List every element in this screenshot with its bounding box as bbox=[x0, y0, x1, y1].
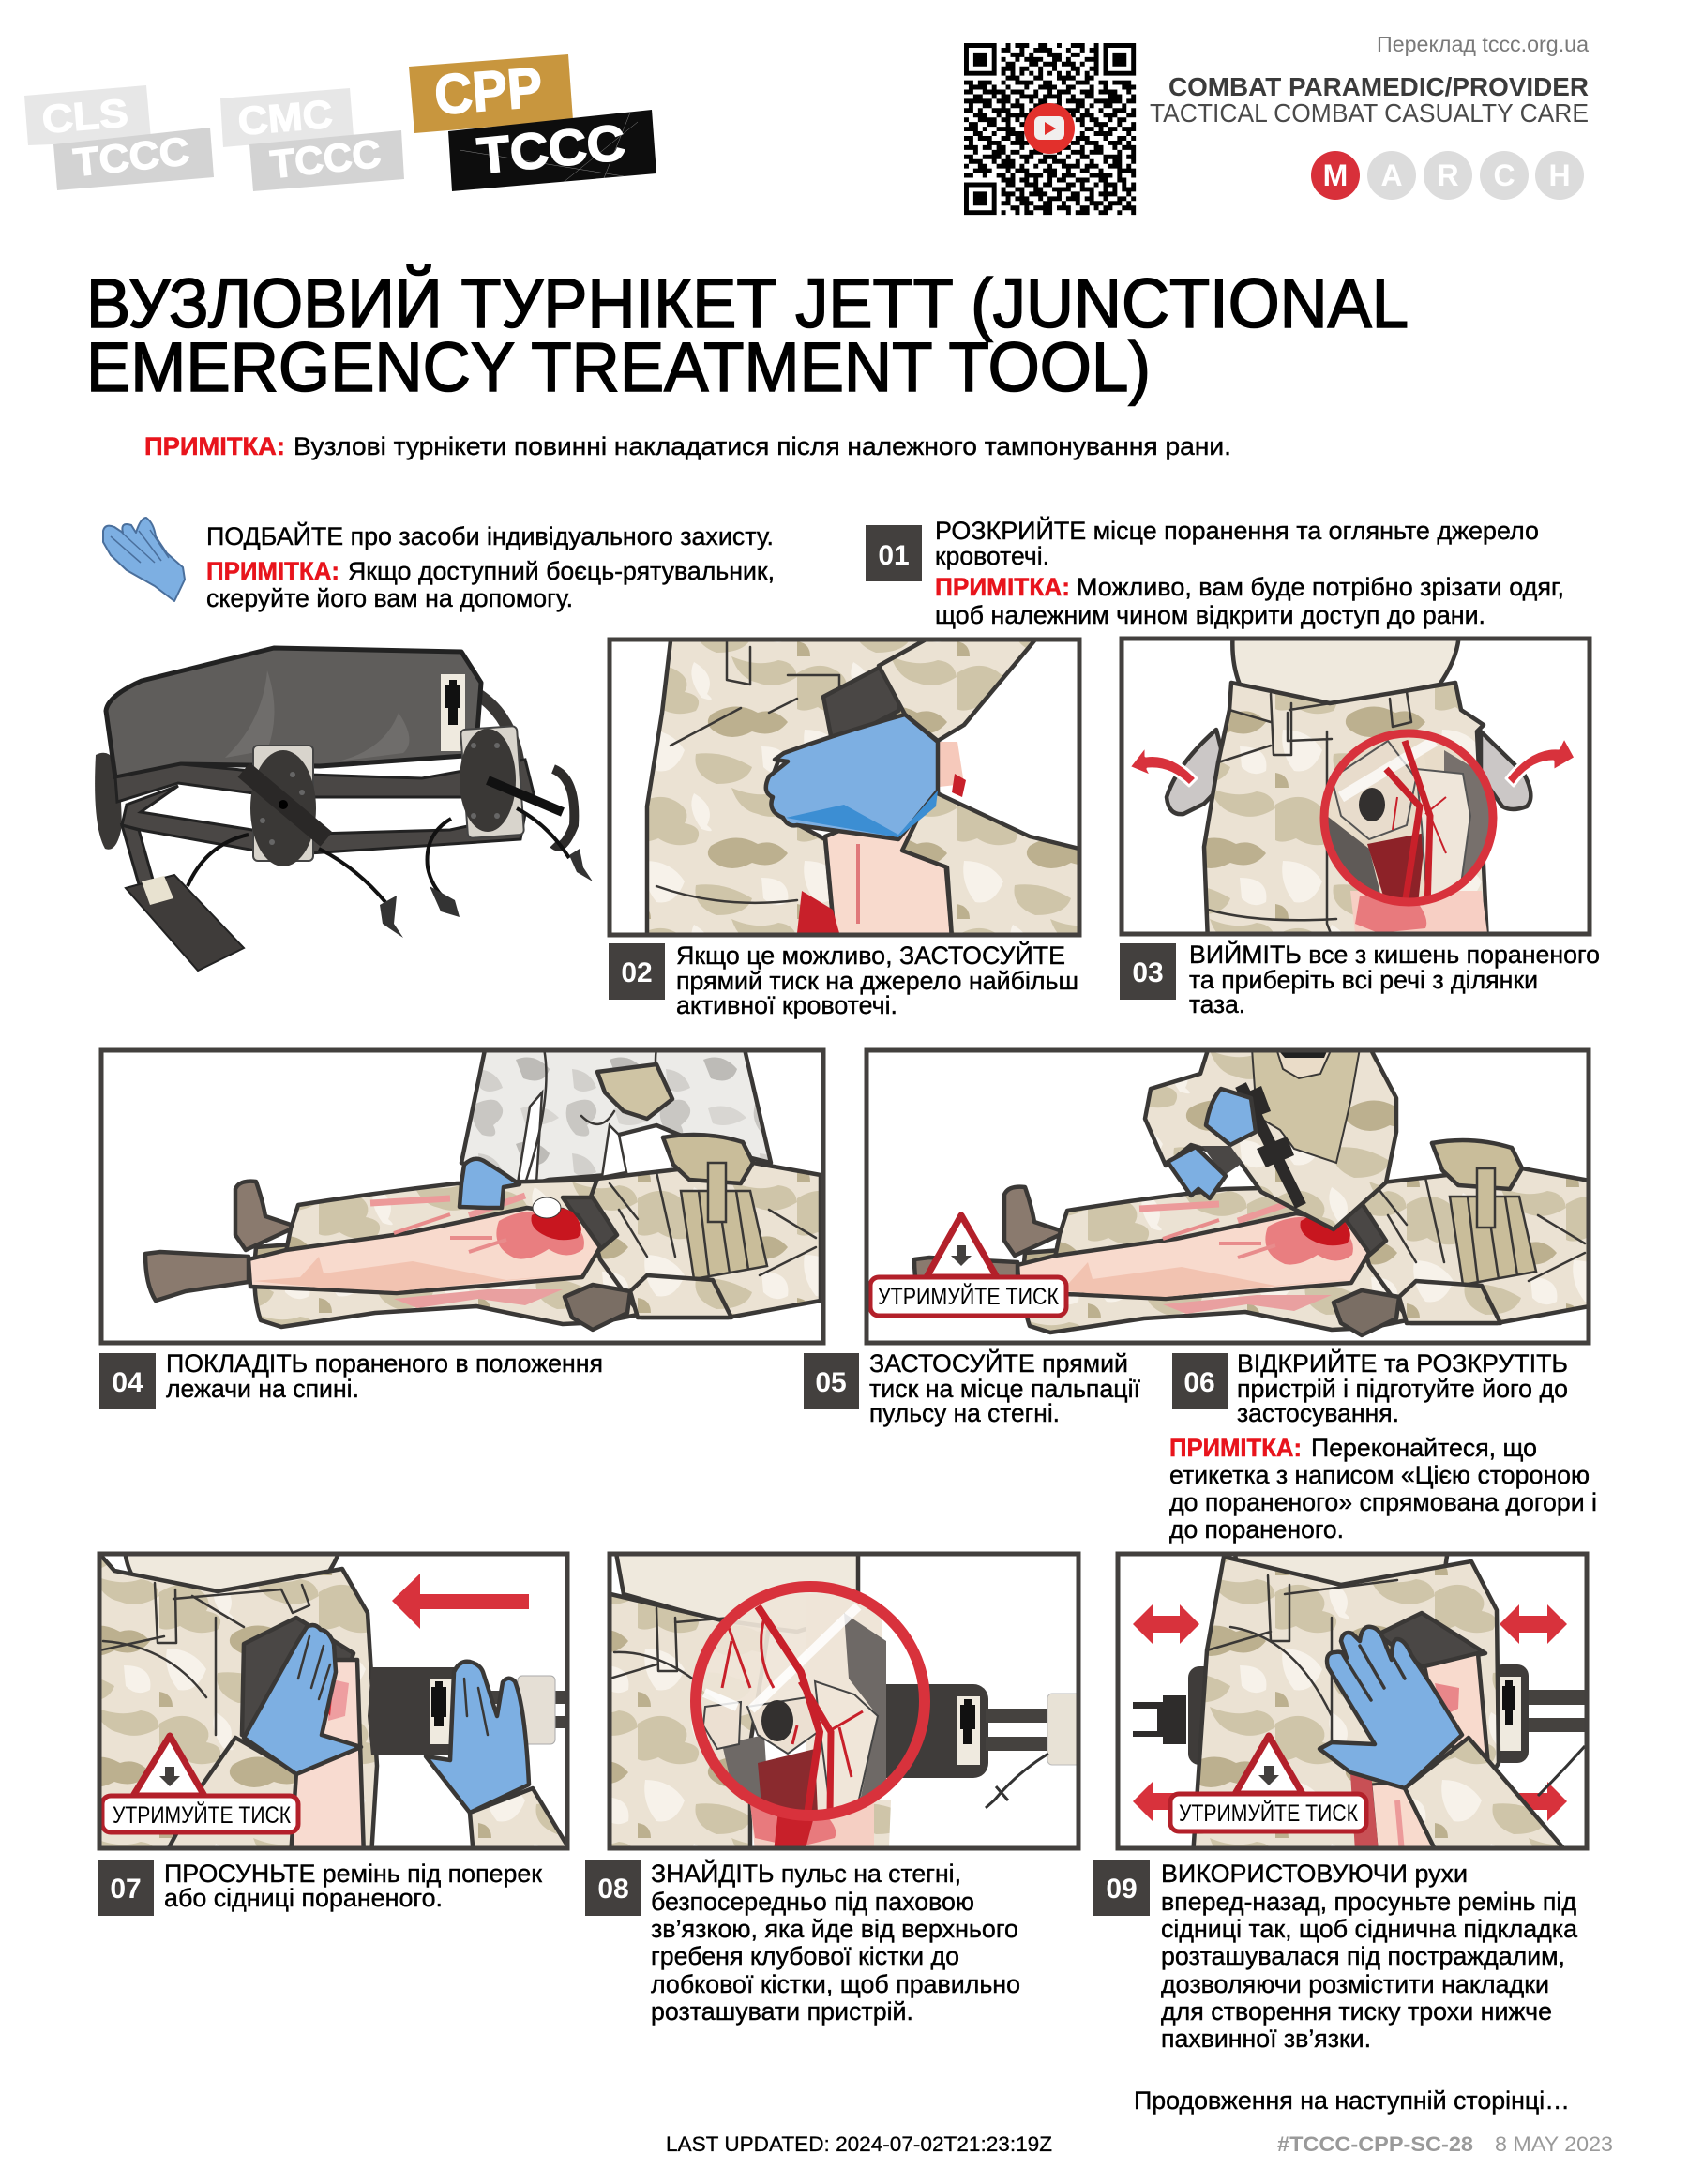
JETT label bbox=[957, 1696, 980, 1765]
torso bbox=[1230, 641, 1461, 701]
MARCH indicator: M bbox=[1323, 158, 1348, 192]
step 09 number: 09 bbox=[1106, 1874, 1138, 1905]
step 09 text: розташувалася під постраждалим, bbox=[1161, 1942, 1565, 1970]
step 06 number: 06 bbox=[1183, 1367, 1215, 1398]
step 08 text: розташувати пристрій. bbox=[651, 1997, 913, 2026]
MARCH indicator: R bbox=[1437, 158, 1459, 192]
JETT label bbox=[430, 1679, 454, 1744]
pressure pad bbox=[821, 666, 900, 735]
hold pressure label bbox=[1170, 1794, 1366, 1831]
step 04 text: ПОКЛАДІТЬ пораненого в положення bbox=[166, 1349, 603, 1378]
step 08 number bbox=[585, 1860, 641, 1916]
step 04 number bbox=[99, 1353, 156, 1409]
thigh with blood bbox=[1350, 891, 1487, 933]
right label bbox=[1500, 1677, 1521, 1751]
PPE text: ПРИМІТКА: bbox=[206, 557, 339, 585]
blue glove bbox=[766, 715, 938, 839]
step 08 text: зв’язкою, яка йде від верхнього bbox=[651, 1915, 1018, 1943]
step 07 text bbox=[164, 1860, 542, 1912]
step 02 text: активної кровотечі. bbox=[676, 991, 897, 1019]
badge: CPP TCCC active bbox=[409, 54, 656, 191]
step 07 number: 07 bbox=[110, 1874, 142, 1905]
step 05 text: пульсу на стегні. bbox=[869, 1399, 1060, 1427]
icon: video play bbox=[1024, 103, 1075, 154]
badge: CLS TCCC bbox=[24, 85, 214, 190]
arrow right bbox=[1506, 737, 1575, 786]
translation credit: Переклад tccc.org.ua bbox=[1377, 32, 1589, 56]
badge: CMC TCCC: CMC bbox=[236, 92, 334, 143]
badge: CPP TCCC active: TCCC bbox=[475, 114, 627, 185]
step 09 text: дозволяючи розмістити накладки bbox=[1161, 1970, 1549, 1998]
badge: CLS TCCC: CLS bbox=[40, 90, 129, 142]
device illustration: JETT tourniquet bbox=[95, 648, 593, 971]
dark pad bbox=[1378, 1613, 1485, 1666]
step 04 number: 04 bbox=[112, 1367, 143, 1398]
step 06 note: до пораненого. bbox=[1169, 1515, 1344, 1544]
step 02 number bbox=[609, 943, 665, 1000]
PPE text: скеруйте його вам на допомогу. bbox=[206, 584, 573, 612]
blue glove lower bbox=[1168, 1147, 1226, 1198]
dark pad bbox=[242, 1618, 354, 1747]
step 06 text bbox=[1237, 1349, 1568, 1427]
anatomy overlay bbox=[699, 1594, 886, 1819]
audience heading: COMBAT PARAMEDIC/PROVIDER bbox=[1168, 72, 1589, 101]
torso bbox=[614, 1543, 858, 1632]
step 01 text: щоб належним чином відкрити доступ до рани. bbox=[935, 601, 1485, 629]
step 04 text bbox=[166, 1349, 603, 1403]
medic pouch bbox=[597, 1064, 672, 1119]
torso bbox=[1233, 1543, 1449, 1587]
step 09 text bbox=[1161, 1860, 1577, 2053]
hold pressure label bbox=[102, 1796, 298, 1832]
panel: step 08 find pulse bbox=[605, 1543, 1085, 1857]
step 02 text bbox=[676, 941, 1078, 1019]
red circle bbox=[1324, 733, 1493, 902]
cord bbox=[1538, 1746, 1585, 1796]
step 09 text: для створення тиску трохи нижче bbox=[1161, 1997, 1552, 2026]
arrow left bbox=[1129, 746, 1197, 786]
step 07 number bbox=[98, 1860, 154, 1916]
step 02 number: 02 bbox=[621, 957, 653, 988]
badge: CLS TCCC: TCCC bbox=[71, 128, 191, 185]
QR code with video icon bbox=[964, 45, 1136, 213]
title bbox=[86, 264, 1409, 406]
sleeve upper arm bbox=[879, 633, 1041, 741]
top note: Вузлові турнікети повинні накладатися після належного тампонування рани. bbox=[294, 432, 1231, 460]
step 04 text: лежачи на спині. bbox=[166, 1375, 359, 1403]
right JETT end bbox=[1491, 1664, 1529, 1763]
right pad plate bbox=[460, 726, 563, 838]
trousers bbox=[1193, 1557, 1499, 1857]
step 05 text: тиск на місце пальпації bbox=[869, 1375, 1141, 1403]
title: ВУЗЛОВИЙ ТУРНІКЕТ JETT (JUNCTIONAL bbox=[86, 264, 1409, 342]
left pad plate bbox=[244, 746, 326, 866]
step 06 text: пристрій і підготуйте його до bbox=[1237, 1375, 1568, 1403]
panel: step 02 direct pressure bbox=[610, 633, 1083, 938]
icon: gloves bbox=[103, 518, 185, 601]
cord bbox=[986, 1754, 1048, 1808]
right pocket bbox=[1481, 731, 1530, 809]
step 08 number: 08 bbox=[597, 1874, 629, 1905]
panel: step 05 femoral pressure bbox=[867, 1041, 1590, 1343]
step 09 text: вперед-назад, просуньте ремінь під bbox=[1161, 1888, 1577, 1916]
PPE text: ПОДБАЙТЕ про засоби індивідуального захисту. bbox=[206, 522, 774, 550]
left blue glove bbox=[244, 1625, 361, 1774]
step 03 text: таза. bbox=[1189, 990, 1245, 1018]
blue glove upper bbox=[1206, 1089, 1256, 1145]
anatomy overlay bbox=[1328, 737, 1489, 898]
badge: CMC TCCC: TCCC bbox=[268, 131, 383, 187]
step 05 number bbox=[804, 1353, 859, 1409]
step 08 text: безпосередньо під паховою bbox=[651, 1888, 974, 1916]
medic bbox=[460, 1052, 773, 1180]
thigh with blood bbox=[750, 1800, 874, 1852]
hold pressure label: УТРИМУЙТЕ ТИСК bbox=[1179, 1799, 1358, 1827]
step 08 text: лобкової кістки, щоб правильно bbox=[651, 1970, 1020, 1998]
hip right bbox=[825, 1608, 882, 1857]
casualty figure bbox=[914, 1140, 1590, 1335]
medic bbox=[1145, 1041, 1396, 1229]
badge: CPP TCCC active: CPP bbox=[432, 55, 545, 127]
PPE text: Якщо доступний боєць-рятувальник, bbox=[348, 557, 775, 585]
step 03 text: ВИЙМІТЬ все з кишень пораненого bbox=[1189, 941, 1600, 969]
step 06 number bbox=[1172, 1353, 1228, 1409]
trousers bbox=[1204, 683, 1487, 942]
medic face bbox=[1276, 1052, 1331, 1079]
sleeve bbox=[1405, 1738, 1571, 1857]
step 05 number: 05 bbox=[815, 1367, 847, 1398]
step 01 text bbox=[935, 517, 1564, 629]
MARCH indicator: A bbox=[1380, 158, 1403, 192]
panel: step 09 back and forth bbox=[1118, 1543, 1590, 1857]
audience heading: TACTICAL COMBAT CASUALTY CARE bbox=[1150, 98, 1589, 128]
hold pressure label: УТРИМУЙТЕ ТИСК bbox=[878, 1282, 1059, 1310]
MARCH indicator: H bbox=[1548, 158, 1571, 192]
sleeve lower arm bbox=[902, 791, 1083, 938]
exposed thigh bbox=[825, 791, 952, 938]
last updated: LAST UPDATED: 2024-07-02T21:23:19Z bbox=[666, 2132, 1052, 2156]
step 03 text: та приберіть всі речі з ділянки bbox=[1189, 966, 1538, 994]
trousers bbox=[645, 641, 917, 932]
warning triangle bbox=[927, 1215, 997, 1277]
step 06 note: ПРИМІТКА: bbox=[1169, 1434, 1302, 1462]
step 09 text: пахвинної зв’язки. bbox=[1161, 2025, 1371, 2053]
title: EMERGENCY TREATMENT TOOL) bbox=[86, 328, 1151, 406]
step 06 note: Переконайтеся, що bbox=[1311, 1434, 1537, 1462]
audience heading bbox=[1150, 72, 1589, 128]
blue glove bbox=[460, 1159, 520, 1208]
JETT belt bbox=[368, 1667, 454, 1755]
step 05 text: ЗАСТОСУЙТЕ прямий bbox=[869, 1349, 1128, 1378]
MARCH indicator bbox=[1311, 151, 1584, 200]
step 07 text: ПРОСУНЬТЕ ремінь під поперек bbox=[164, 1860, 542, 1888]
right sleeve bbox=[470, 1788, 574, 1857]
hold pressure label: УТРИМУЙТЕ ТИСК bbox=[113, 1800, 291, 1829]
step 02 text: прямий тиск на джерело найбільш bbox=[676, 967, 1078, 995]
step 01 text: Можливо, вам буде потрібно зрізати одяг, bbox=[1077, 573, 1564, 601]
torso bbox=[124, 1543, 342, 1596]
step 09 number bbox=[1093, 1860, 1150, 1916]
top note: ПРИМІТКА: bbox=[144, 432, 285, 460]
step 07 text: або сідниці пораненого. bbox=[164, 1884, 443, 1912]
step 08 text: гребеня клубової кістки до bbox=[651, 1942, 959, 1970]
document date: 8 MAY 2023 bbox=[1495, 2132, 1613, 2156]
straps bbox=[986, 1709, 1054, 1751]
PPE text bbox=[206, 522, 775, 612]
continuation note: Продовження на наступній сторінці… bbox=[1134, 2086, 1570, 2115]
MARCH indicator: C bbox=[1493, 158, 1515, 192]
step 08 text: ЗНАЙДІТЬ пульс на стегні, bbox=[651, 1860, 961, 1888]
trousers bbox=[94, 1547, 377, 1857]
gauze bbox=[533, 1197, 561, 1218]
step 01 text: кровотечі. bbox=[935, 542, 1049, 570]
document id: #TCCC-CPP-SC-28 bbox=[1277, 2132, 1473, 2156]
red arrow bbox=[392, 1574, 529, 1629]
left JETT end bbox=[1188, 1666, 1216, 1765]
left sleeve bbox=[164, 1738, 296, 1857]
buckle bbox=[1047, 1694, 1085, 1765]
warning triangle bbox=[1235, 1736, 1303, 1794]
panel: step 07 slide strap bbox=[94, 1543, 574, 1857]
warning triangle bbox=[133, 1736, 204, 1796]
step 08 text bbox=[651, 1860, 1020, 2026]
step 06 note: етикетка з написом «Цією стороною bbox=[1169, 1461, 1590, 1489]
step 06 note: до пораненого» спрямована догори і bbox=[1169, 1488, 1597, 1516]
red arrows bbox=[1133, 1604, 1567, 1821]
casualty figure bbox=[145, 1135, 821, 1330]
JETT pad bbox=[867, 1684, 988, 1778]
step 01 number: 01 bbox=[878, 540, 910, 571]
step 06 note bbox=[1169, 1434, 1597, 1544]
panel: step 04 casualty supine bbox=[101, 1041, 823, 1343]
badge: CMC TCCC bbox=[220, 88, 404, 191]
step 03 number bbox=[1120, 943, 1176, 1000]
skill level badges bbox=[24, 54, 656, 191]
straps bbox=[490, 1691, 567, 1728]
step 03 text bbox=[1189, 941, 1600, 1018]
trousers bbox=[605, 1594, 769, 1857]
step 01 number bbox=[866, 525, 922, 581]
hold pressure label bbox=[870, 1277, 1066, 1316]
left buckle bbox=[1133, 1695, 1186, 1744]
step 02 text: Якщо це можливо, ЗАСТОСУЙТЕ bbox=[676, 941, 1065, 970]
step 03 number: 03 bbox=[1132, 957, 1164, 988]
step 09 text: сідниці так, щоб сіднична підкладка bbox=[1161, 1915, 1577, 1943]
right blue glove bbox=[426, 1662, 529, 1813]
step 06 text: застосування. bbox=[1237, 1399, 1399, 1427]
medic chest rig bbox=[1252, 1048, 1360, 1163]
straps bbox=[1529, 1690, 1590, 1732]
step 09 text: ВИКОРИСТОВУЮЧИ рухи bbox=[1161, 1860, 1468, 1888]
step 01 text: ПРИМІТКА: bbox=[935, 573, 1070, 601]
panel: step 03 empty pockets bbox=[1122, 630, 1590, 942]
thigh bbox=[275, 1660, 364, 1857]
red circle bbox=[696, 1587, 925, 1815]
left pocket bbox=[1167, 730, 1228, 814]
thigh bbox=[1424, 1653, 1488, 1766]
step 05 text bbox=[869, 1349, 1141, 1427]
blue glove bbox=[1319, 1627, 1462, 1788]
JETT device held bbox=[1241, 1085, 1301, 1206]
buckle bbox=[518, 1676, 555, 1744]
step 06 text: ВІДКРИЙТЕ та РОЗКРУТІТЬ bbox=[1237, 1349, 1568, 1378]
step 01 text: РОЗКРИЙТЕ місце поранення та огляньте джерело bbox=[935, 517, 1539, 545]
